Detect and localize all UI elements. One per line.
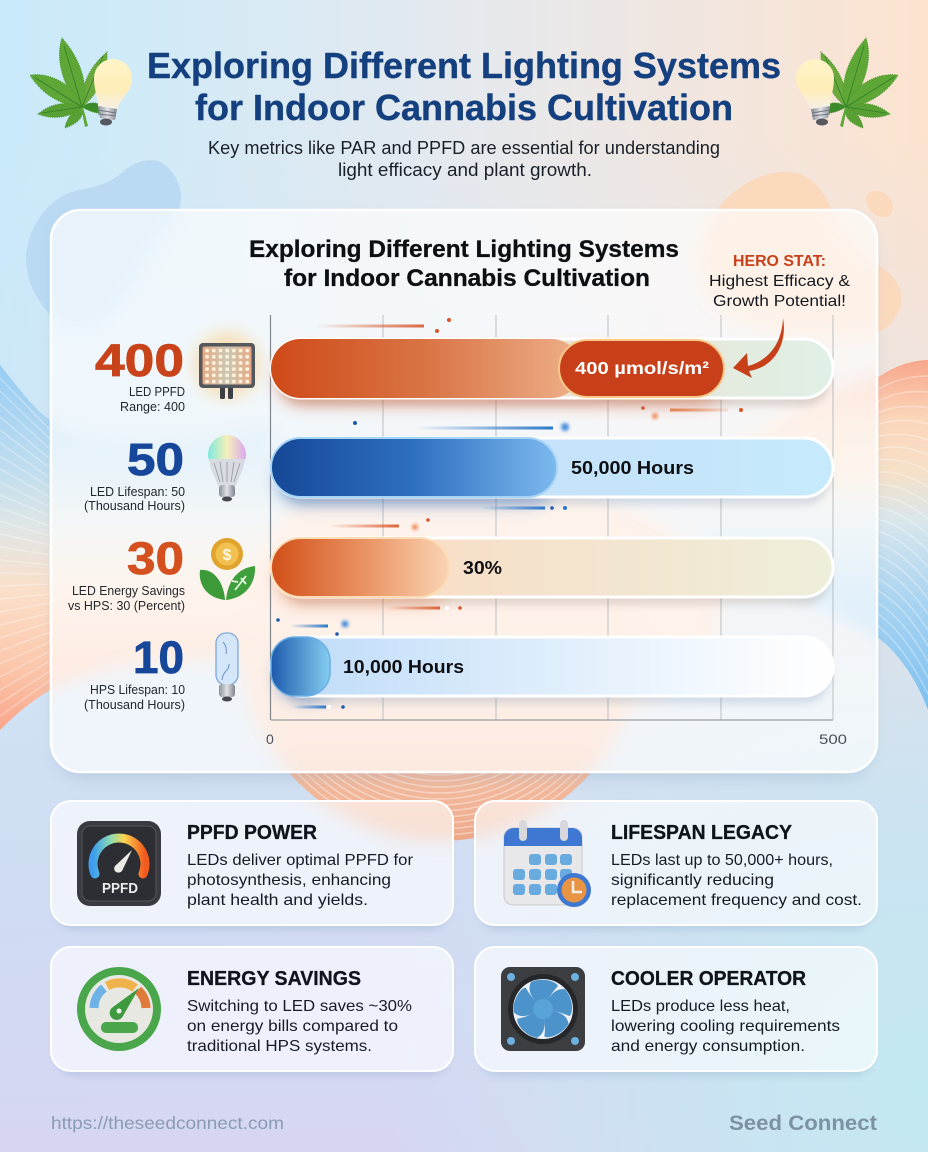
bar: LED PPFD 400 — [271, 318, 833, 419]
metric: 10 HPS lifespan: HPS Lifespan: 10 — [90, 683, 185, 697]
bar: LED lifespan 50,000 hours — [271, 421, 833, 510]
metric: 50 LED lifespan: (Thousand Hours) — [84, 499, 185, 513]
icon: PPFD gauge — [77, 821, 161, 906]
metric: 400 LED PPFD: 400 — [95, 335, 184, 386]
icon: coin and plant: $ — [222, 547, 232, 564]
subtitle: light efficacy and plant growth. — [338, 160, 592, 180]
chart grid and axis: 0 — [266, 731, 274, 747]
callout: hero stat: Growth Potential! — [713, 293, 846, 310]
subtitle — [208, 138, 720, 180]
metric: 400 LED PPFD: Range: 400 — [120, 400, 185, 414]
header icon: cannabis leaf and light bulb (left) — [30, 38, 132, 128]
icon: green efficiency gauge — [77, 967, 161, 1051]
metric: 10 HPS lifespan — [84, 632, 185, 712]
main title: Exploring Different Lighting Systems — [147, 45, 781, 86]
card body text: and energy consumption. — [611, 1038, 805, 1055]
card body text: replacement frequency and cost. — [611, 892, 862, 909]
chart grid and axis — [266, 315, 847, 747]
card body text: traditional HPS systems. — [187, 1038, 372, 1055]
icon: calendar with clock — [504, 820, 591, 907]
metric: 50 LED lifespan — [84, 434, 185, 513]
metric: 50 LED lifespan: LED Lifespan: 50 — [90, 485, 185, 499]
card body text: LEDs deliver optimal PPFD for — [187, 852, 414, 869]
chart grid and axis: 500 — [819, 731, 847, 747]
card body text — [187, 852, 414, 909]
card body text: Switching to LED saves ~30% — [187, 998, 412, 1015]
subtitle: Key metrics like PAR and PPFD are essential for understanding — [208, 138, 720, 158]
card body text: significantly reducing — [611, 872, 774, 889]
callout: hero stat — [709, 253, 850, 310]
chart heading: Exploring Different Lighting Systems — [249, 236, 679, 263]
main title: for Indoor Cannabis Cultivation — [195, 87, 733, 128]
icon: LED panel — [194, 332, 260, 399]
bar: LED PPFD 400: 400 µmol/s/m² — [575, 358, 709, 378]
panel: cooler operator — [474, 946, 878, 1077]
card heading: PPFD POWER — [187, 822, 318, 844]
icon: PPFD gauge: PPFD — [102, 880, 138, 897]
metric: 50 LED lifespan: 50 — [127, 434, 184, 485]
card heading: ENERGY SAVINGS — [187, 968, 361, 990]
header icon: cannabis leaf and light bulb (right) — [796, 38, 898, 128]
metric: 30 energy savings: vs HPS: 30 (Percent) — [68, 599, 185, 613]
card body text — [187, 998, 412, 1055]
panel: energy savings — [50, 946, 454, 1077]
bar: LED energy savings 30% — [271, 518, 833, 610]
bar: HPS lifespan 10,000 hours: 10,000 Hours — [343, 657, 464, 677]
footer url: https://theseedconnect.com — [51, 1113, 284, 1133]
chart heading — [249, 236, 679, 292]
icon: cooling fan — [501, 967, 585, 1051]
metric: 10 HPS lifespan: 10 — [133, 632, 184, 683]
metric: 400 LED PPFD — [95, 335, 185, 414]
card body text: LEDs last up to 50,000+ hours, — [611, 852, 833, 869]
card body text — [611, 852, 862, 909]
bar: HPS lifespan 10,000 hours — [271, 618, 833, 709]
callout: hero stat: HERO STAT: — [733, 253, 826, 270]
icon: HPS tube lamp — [216, 633, 238, 702]
metric: 30 energy savings: LED Energy Savings — [72, 584, 185, 598]
icon: colour LED bulb — [208, 435, 246, 502]
metric: 30 energy savings: 30 — [127, 533, 184, 584]
metric: 400 LED PPFD: LED PPFD — [129, 385, 185, 399]
icon: coin and plant — [200, 538, 255, 600]
metric: 10 HPS lifespan: (Thousand Hours) — [84, 698, 185, 712]
footer brand: Seed Connect — [729, 1111, 877, 1135]
bar: LED energy savings 30%: 30% — [463, 558, 502, 578]
chart heading: for Indoor Cannabis Cultivation — [284, 265, 650, 292]
card body text — [611, 998, 840, 1055]
panel: lifespan legacy — [474, 800, 878, 931]
card heading: COOLER OPERATOR — [611, 968, 807, 990]
metric: 30 energy savings — [68, 533, 185, 613]
card body text: on energy bills compared to — [187, 1018, 398, 1035]
bar: LED lifespan 50,000 hours: 50,000 Hours — [571, 458, 694, 478]
card body text: lowering cooling requirements — [611, 1018, 840, 1035]
callout: hero stat: Highest Efficacy & — [709, 273, 850, 290]
arrow: hero stat pointer — [733, 318, 784, 378]
panel: main chart card — [50, 208, 878, 783]
panel: PPFD power — [50, 800, 454, 931]
main title — [147, 45, 781, 128]
card body text: plant health and yields. — [187, 892, 368, 909]
card heading: LIFESPAN LEGACY — [611, 822, 793, 844]
card body text: LEDs produce less heat, — [611, 998, 790, 1015]
card body text: photosynthesis, enhancing — [187, 872, 391, 889]
